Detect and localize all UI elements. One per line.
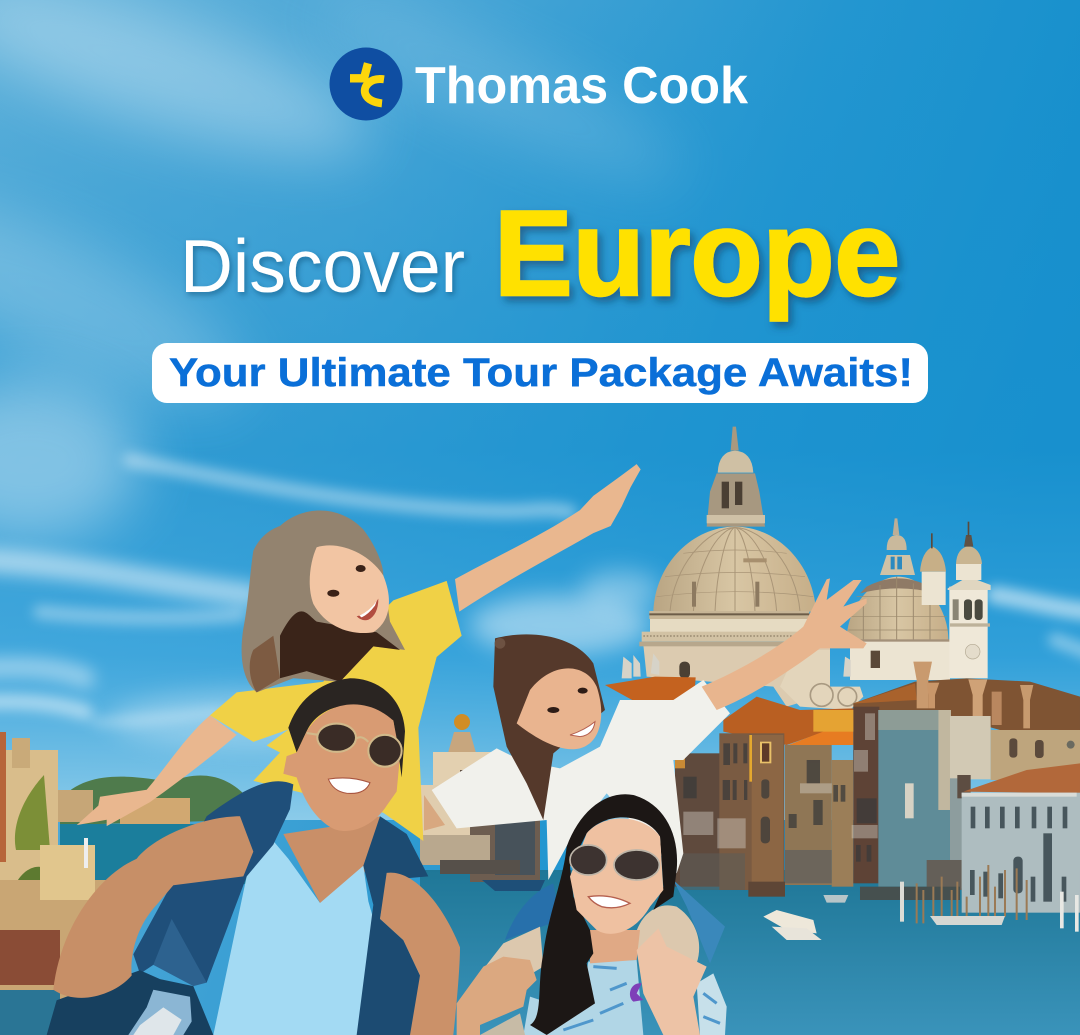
logo badge (330, 48, 402, 120)
hair (242, 511, 405, 692)
child's knees (633, 905, 699, 963)
right arm and hand (380, 873, 460, 1035)
face (570, 819, 663, 934)
face (310, 545, 389, 633)
girl in white shirt (424, 634, 730, 963)
sunglasses (570, 845, 659, 880)
mid-ground customs house with golden sphere (420, 714, 545, 891)
floral top (523, 960, 727, 1035)
girl in yellow shirt (77, 464, 641, 841)
left hand (457, 957, 537, 1035)
smile (328, 778, 370, 793)
main dome basilica (622, 427, 863, 710)
subtitle pill: Your Ultimate Tour Package Awaits! (169, 351, 913, 395)
jeans over shoulders (505, 883, 560, 940)
left arm (424, 795, 445, 831)
logo: Thomas Cook (330, 48, 748, 120)
canal-side palazzi (675, 707, 1080, 913)
right hand (637, 928, 707, 1035)
mother (457, 794, 727, 1035)
mooring posts and motorboats (748, 865, 1079, 940)
smile (588, 896, 630, 908)
face (517, 668, 601, 749)
white top (432, 680, 730, 880)
right arm and raised hand (455, 464, 641, 612)
hair (288, 678, 405, 777)
neck (590, 930, 640, 963)
second dome church (845, 518, 950, 680)
yellow t-shirt (210, 581, 462, 841)
shoe (128, 990, 192, 1035)
Venetian cityscape (605, 427, 1080, 940)
subtitle pill (152, 343, 928, 403)
neck (283, 816, 380, 903)
light blue polo shirt (213, 841, 373, 1035)
denim shoulders (133, 781, 293, 983)
raised arm and hand of girl in white (702, 578, 867, 710)
bell tower (948, 522, 991, 678)
headline: Discover: Discover (180, 224, 465, 308)
left background: lagoon and shoreline (0, 732, 250, 1035)
father (47, 678, 460, 1035)
left arm and hand (53, 816, 253, 998)
hair (493, 634, 605, 820)
main canal water (420, 870, 1080, 1035)
clouds (0, 0, 1080, 750)
left arm (77, 715, 237, 826)
hair (530, 794, 677, 1035)
headline: Europe: Europe (494, 185, 900, 321)
terracotta roofs (605, 662, 1080, 745)
brand name: Thomas Cook (415, 57, 748, 115)
face (283, 704, 400, 831)
arm below hand (480, 1013, 525, 1035)
sunglasses (307, 724, 402, 767)
